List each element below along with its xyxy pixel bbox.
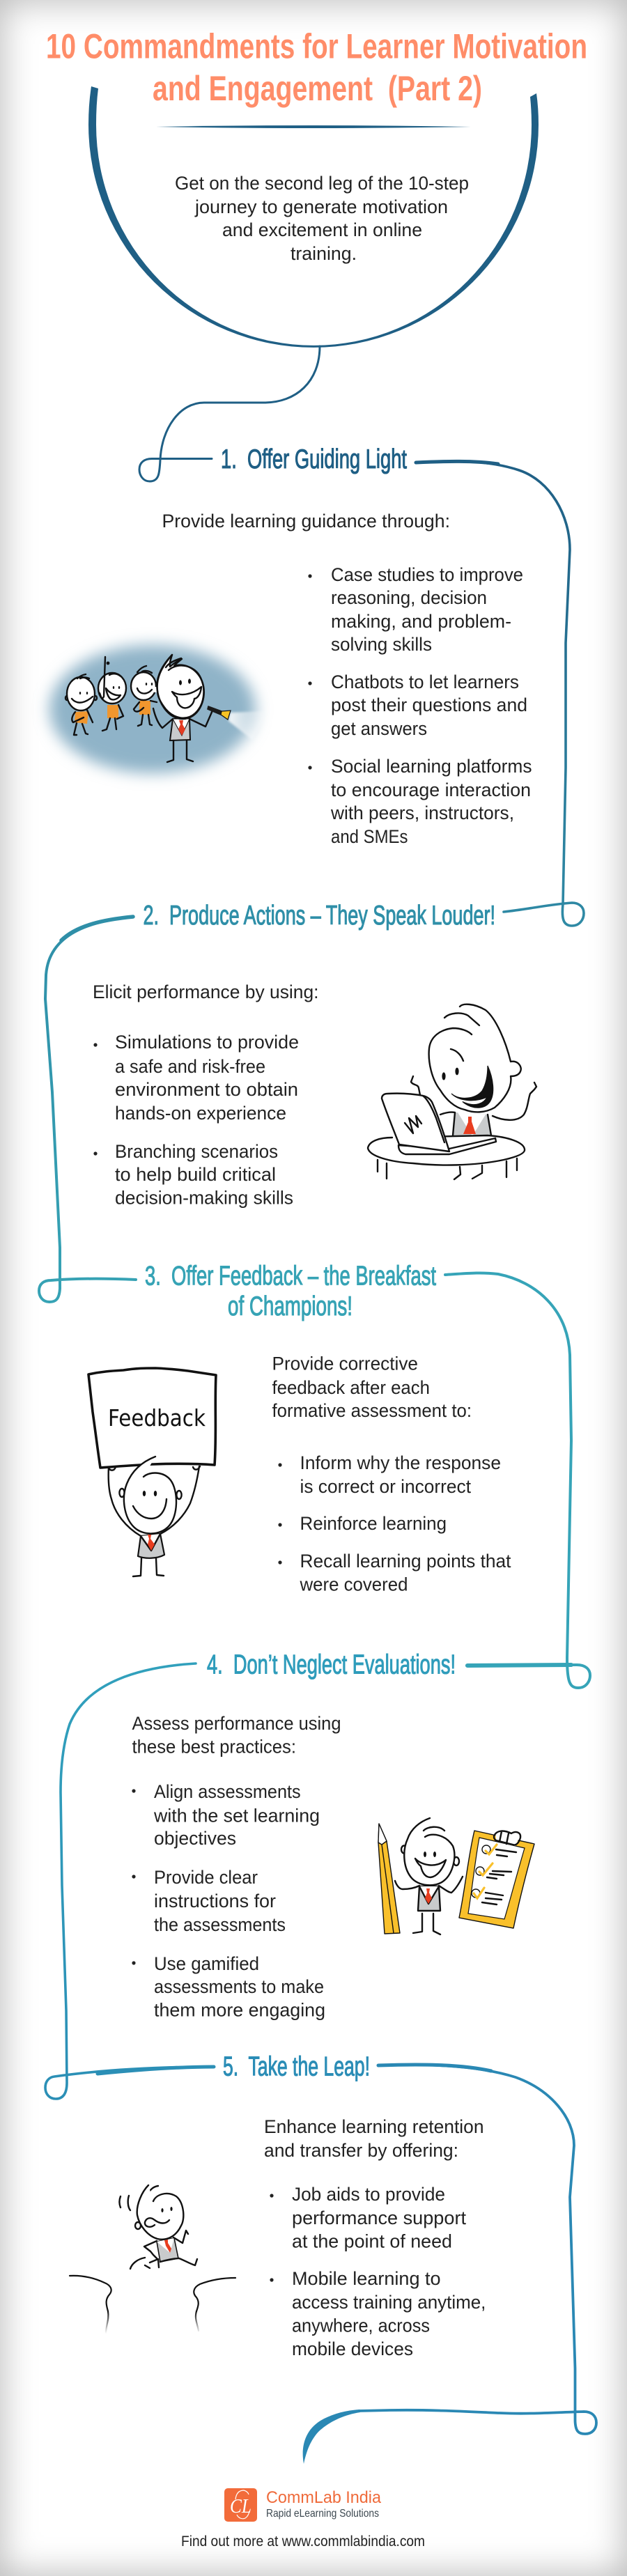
connector: circle to step 1 (139, 346, 320, 481)
guide (153, 655, 212, 762)
text: step 3 intro (272, 1353, 472, 1421)
list: step 4 bullets: Align assessments (154, 1781, 301, 1802)
list: step 3 bullets: were covered (300, 1574, 408, 1595)
logo: CommLab India (224, 2488, 382, 2522)
list: step 5 bullets (270, 2184, 486, 2359)
intro text: Get on the second leg of the 10-step (175, 173, 469, 194)
pencil (378, 1824, 400, 1934)
list: step 4 bullets: Use gamified (154, 1953, 259, 1974)
list: step 4 bullets: them more engaging (154, 2000, 325, 2021)
list: step 4 bullets: the assessments (154, 1914, 286, 1935)
list: step 1 bullets: and SMEs (331, 826, 408, 847)
text: step 1 intro: Provide learning guidance through: (162, 511, 450, 532)
list: step 4 bullets (132, 1781, 325, 2021)
list: step 5 bullets: Mobile learning to (292, 2268, 441, 2289)
illustration: character with pencil and checklist (378, 1818, 534, 1934)
list: step 3 bullets: Reinforce learning (300, 1513, 447, 1534)
learner 2 (98, 657, 126, 731)
heading: step 5: 5. Take the Leap! (223, 2051, 370, 2081)
intro text: and excitement in online (222, 219, 422, 240)
list: step 2 bullets: a safe and risk-free (115, 1056, 265, 1077)
table (368, 1135, 525, 1165)
intro text: journey to generate motivation (194, 196, 448, 217)
list: step 1 bullets: to encourage interaction (331, 779, 531, 800)
list: step 4 bullets: instructions for (154, 1891, 276, 1911)
illustration: character at laptop (368, 1004, 536, 1179)
intro text (175, 173, 469, 264)
list: step 2 bullets: to help build critical (115, 1164, 276, 1185)
text: step 5 intro: Enhance learning retention (264, 2116, 483, 2137)
footer link text: Find out more at www.commlabindia.com (181, 2534, 425, 2550)
list: step 2 bullets (93, 1032, 299, 1208)
text: step 3 intro: feedback after each (272, 1377, 430, 1398)
logo mark: CL (230, 2496, 251, 2517)
list: step 1 bullets: Case studies to improve (331, 564, 523, 585)
list: step 1 bullets: with peers, instructors, (330, 802, 514, 823)
list: step 2 bullets: environment to obtain (115, 1079, 298, 1100)
text: step 5 intro (264, 2116, 483, 2161)
list: step 1 bullets: reasoning, decision (331, 587, 487, 608)
list: step 2 bullets: Branching scenarios (115, 1141, 278, 1162)
list: step 1 bullets: solving skills (331, 634, 432, 655)
title (46, 26, 587, 108)
list: step 5 bullets: Job aids to provide (292, 2184, 445, 2205)
character (120, 2185, 197, 2269)
logo text: CommLab India (266, 2488, 382, 2507)
sign (88, 1368, 216, 1468)
illustration: guide with flashlight and learners (49, 645, 263, 773)
list: step 1 bullets: Chatbots to let learners (331, 672, 519, 692)
list: step 5 bullets: mobile devices (292, 2338, 413, 2359)
list: step 2 bullets: decision-making skills (115, 1187, 293, 1208)
arms (411, 1076, 536, 1120)
heading: step 1: 1. Offer Guiding Light (221, 444, 407, 474)
heading: step 3: of Champions! (228, 1291, 353, 1321)
text: step 4 intro (132, 1713, 341, 1757)
sign label: Feedback (108, 1404, 206, 1431)
suit and tie (440, 1112, 491, 1137)
list: step 1 bullets: post their questions and (331, 695, 527, 715)
list: step 5 bullets: access training anytime, (292, 2292, 486, 2313)
illustration: character holding feedback sign (88, 1368, 216, 1576)
head (429, 1004, 521, 1112)
text: step 3 intro: formative assessment to: (272, 1400, 472, 1421)
heading: step 3: 3. Offer Feedback – the Breakfast (145, 1262, 436, 1291)
text: step 3 intro: Provide corrective (272, 1353, 418, 1374)
heading: step 3 (145, 1262, 436, 1321)
title: and Engagement (Part 2) (153, 69, 482, 108)
list: step 2 bullets: Simulations to provide (115, 1032, 299, 1053)
connector: step 5 to footer (303, 2065, 596, 2464)
flashlight (208, 706, 231, 720)
clipboard (459, 1831, 534, 1928)
learner 3 (131, 666, 157, 726)
text: step 4 intro: Assess performance using (132, 1713, 341, 1734)
laptop (382, 1094, 496, 1154)
list: step 1 bullets: get answers (331, 718, 427, 739)
intro circle frame (88, 86, 539, 348)
list: step 4 bullets: objectives (154, 1828, 236, 1849)
title divider (156, 125, 471, 128)
list: step 5 bullets: performance support (292, 2208, 466, 2228)
list: step 3 bullets (278, 1452, 511, 1595)
flashlight beam (229, 711, 263, 740)
character (119, 1457, 182, 1576)
text: step 4 intro: these best practices: (132, 1736, 296, 1757)
table legs (378, 1158, 517, 1179)
cliffs (70, 2276, 235, 2334)
intro text: training. (291, 243, 357, 264)
arms (109, 1466, 200, 1536)
logo mark (224, 2488, 257, 2522)
list: step 5 bullets: at the point of need (292, 2231, 452, 2252)
list: step 4 bullets: Provide clear (154, 1867, 258, 1888)
connector: step 2 to step 3 (39, 917, 136, 1302)
connector: step 1 to step 2 (416, 461, 584, 926)
list: step 3 bullets: Recall learning points that (300, 1551, 511, 1572)
list: step 2 bullets: hands-on experience (115, 1103, 286, 1124)
list: step 1 bullets: making, and problem- (331, 611, 511, 632)
text: step 5 intro: and transfer by offering: (264, 2140, 458, 2161)
list: step 4 bullets: with the set learning (153, 1806, 320, 1826)
heading: step 4: 4. Don’t Neglect Evaluations! (207, 1650, 456, 1680)
learner 1 (65, 674, 97, 735)
list: step 1 bullets: Social learning platforms (331, 756, 532, 777)
connector: step 4 to step 5 (45, 1663, 214, 2099)
logo: CommLab India: Rapid eLearning Solutions (266, 2508, 379, 2520)
text: step 2 intro: Elicit performance by using: (93, 981, 319, 1002)
list: step 1 bullets (308, 564, 532, 847)
list: step 4 bullets: assessments to make (154, 1976, 324, 1997)
connector: step 3 to step 4 (445, 1273, 590, 1688)
illustration: character leaping over gap (70, 2185, 235, 2334)
list: step 5 bullets: anywhere, across (292, 2315, 430, 2336)
list: step 3 bullets: is correct or incorrect (300, 1476, 471, 1497)
character (395, 1818, 463, 1934)
list: step 3 bullets: Inform why the response (300, 1452, 501, 1473)
